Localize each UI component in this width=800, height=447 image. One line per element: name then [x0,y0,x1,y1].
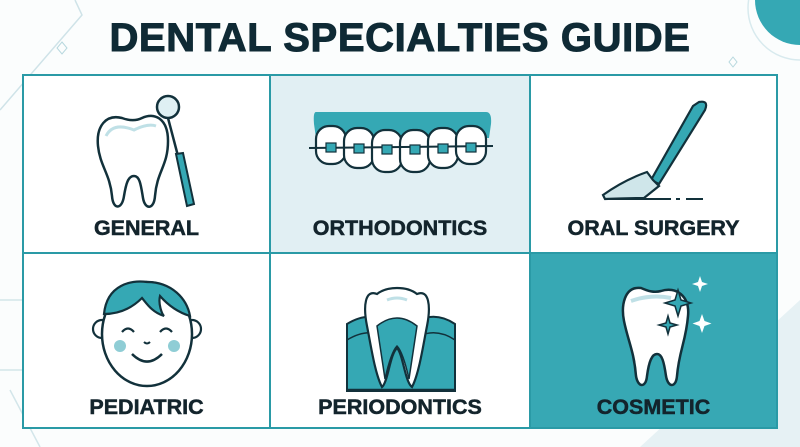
label: ORAL SURGERY [567,216,740,240]
icon: tooth in gum [346,286,456,392]
label: GENERAL [94,216,199,240]
label: ORTHODONTICS [313,216,487,240]
panel: periodontics [269,252,531,429]
label: COSMETIC [597,395,710,419]
label: PERIODONTICS [318,395,482,419]
panel: general [22,74,271,254]
title: DENTAL SPECIALTIES GUIDE [109,16,691,60]
panel: orthodontics [269,74,531,254]
icon: sparkling tooth [622,276,712,386]
icon: tooth with mirror [96,94,196,208]
icon: scalpel [602,100,708,200]
label: PEDIATRIC [89,395,204,419]
panel: pediatric [22,252,271,429]
panel: cosmetic [529,252,778,429]
icon: braces [309,112,493,174]
panel: oral surgery [529,74,778,254]
icon: child face [92,280,202,388]
